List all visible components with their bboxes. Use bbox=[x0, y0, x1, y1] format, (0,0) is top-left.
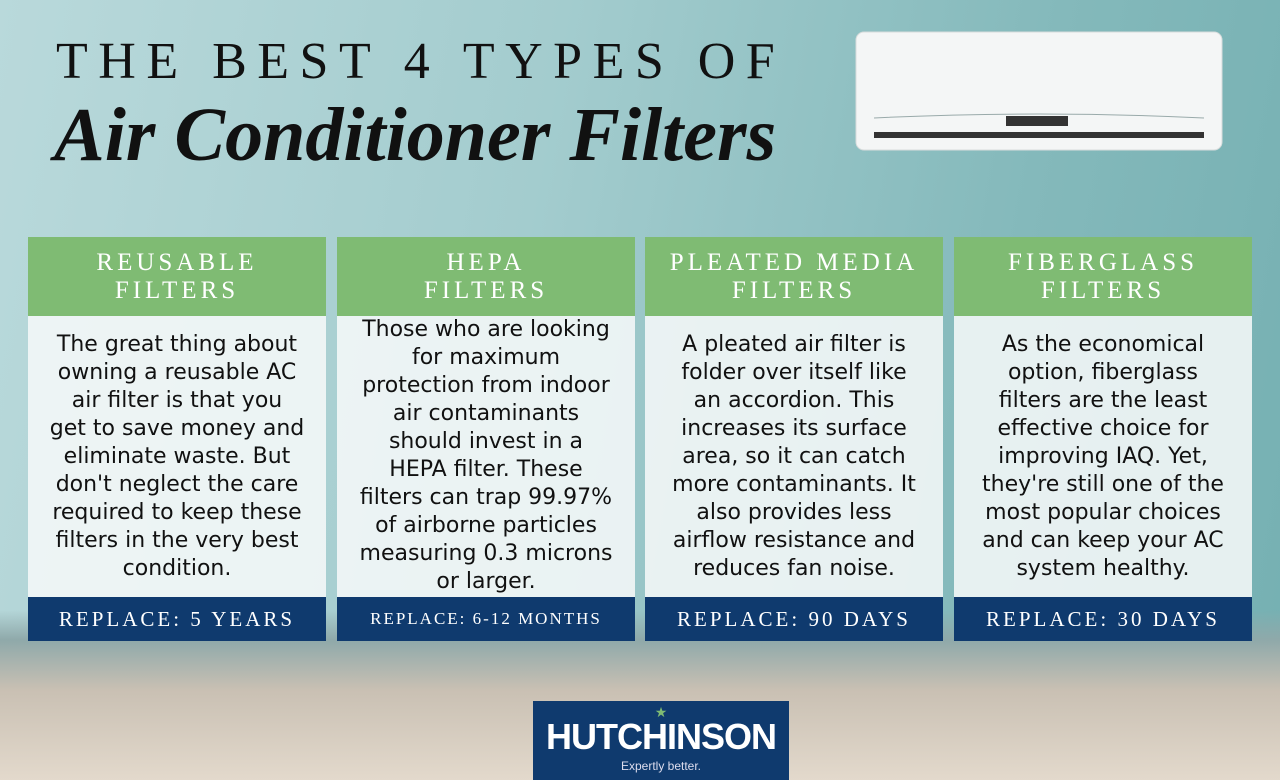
panel: hepa: air contaminants bbox=[393, 401, 579, 426]
panel: reusable: condition. bbox=[123, 556, 231, 580]
panel: fiberglass: As the economical bbox=[1002, 332, 1204, 356]
panel: fiberglass: effective choice for bbox=[997, 416, 1209, 440]
panel: hepa: or larger. bbox=[436, 569, 536, 594]
panel: pleated media: an accordion. This bbox=[694, 388, 894, 412]
panel: reusable: eliminate waste. But bbox=[64, 444, 290, 468]
panel: fiberglass: improving IAQ. Yet, bbox=[998, 444, 1208, 468]
panel: fiberglass: most popular choices bbox=[985, 500, 1221, 524]
panel: hepa: filters can trap 99.97% bbox=[360, 485, 612, 510]
panel: reusable: don't neglect the care bbox=[56, 472, 298, 496]
panel: reusable: REUSABLE bbox=[96, 249, 258, 276]
panel: hepa: measuring 0.3 microns bbox=[360, 541, 612, 566]
panel: fiberglass: filters are the least bbox=[999, 388, 1207, 412]
panel: pleated media: increases its surface bbox=[681, 416, 907, 440]
panel: reusable: air filter is that you bbox=[72, 388, 282, 412]
panel: pleated media bbox=[645, 237, 943, 641]
panel: fiberglass: REPLACE: 30 DAYS bbox=[986, 607, 1220, 631]
panel: fiberglass: and can keep your AC bbox=[982, 528, 1224, 552]
title line 1: THE BEST 4 TYPES OF bbox=[56, 33, 785, 90]
panel: pleated media: reduces fan noise. bbox=[693, 556, 895, 580]
panel: hepa: HEPA filter. These bbox=[389, 457, 583, 482]
panel: pleated media: FILTERS bbox=[732, 277, 856, 304]
panel: pleated media: folder over itself like bbox=[681, 360, 907, 384]
panel: reusable: get to save money and bbox=[50, 416, 304, 440]
panel: hepa: FILTERS bbox=[424, 277, 548, 304]
panel: pleated media: PLEATED MEDIA bbox=[670, 249, 918, 276]
panel: pleated media: A pleated air filter is bbox=[682, 332, 906, 356]
panel: reusable bbox=[28, 237, 326, 641]
panel: reusable: The great thing about bbox=[57, 332, 297, 356]
panel: fiberglass: system healthy. bbox=[1016, 556, 1190, 580]
logo: hutchinson bbox=[533, 701, 789, 780]
panel: reusable: required to keep these bbox=[52, 500, 302, 524]
panel: pleated media: also provides less bbox=[696, 500, 892, 524]
panel: fiberglass: FIBERGLASS bbox=[1008, 249, 1198, 276]
panel: hepa: Those who are looking bbox=[362, 317, 610, 342]
panel: hepa: protection from indoor bbox=[362, 373, 610, 398]
logo: hutchinson: ★ bbox=[655, 704, 667, 720]
panel: pleated media: more contaminants. It bbox=[672, 472, 916, 496]
logo: hutchinson: HUTCHINSON bbox=[546, 716, 776, 757]
panel: fiberglass: option, fiberglass bbox=[1008, 360, 1198, 384]
panel: pleated media: airflow resistance and bbox=[673, 528, 915, 552]
panel: pleated media: area, so it can catch bbox=[682, 444, 906, 468]
panel: fiberglass: FILTERS bbox=[1041, 277, 1165, 304]
icon: air conditioner unit bbox=[856, 32, 1222, 150]
panel: pleated media: REPLACE: 90 DAYS bbox=[677, 607, 911, 631]
panel: hepa: HEPA bbox=[446, 249, 526, 276]
panel: reusable: filters in the very best bbox=[56, 528, 298, 552]
panel: reusable: FILTERS bbox=[115, 277, 239, 304]
panel: hepa: REPLACE: 6-12 MONTHS bbox=[370, 609, 602, 628]
panel: hepa: for maximum bbox=[412, 345, 560, 370]
panel: reusable: REPLACE: 5 YEARS bbox=[59, 607, 295, 631]
panel: reusable: owning a reusable AC bbox=[58, 360, 296, 384]
title line 2: Air Conditioner Filters bbox=[54, 93, 776, 177]
panel: fiberglass bbox=[954, 237, 1252, 641]
logo: hutchinson: Expertly better. bbox=[621, 759, 701, 773]
panel: hepa: of airborne particles bbox=[375, 513, 597, 538]
panel: fiberglass: they're still one of the bbox=[982, 472, 1224, 496]
panel: hepa: should invest in a bbox=[389, 429, 583, 454]
panel: hepa bbox=[337, 237, 635, 641]
